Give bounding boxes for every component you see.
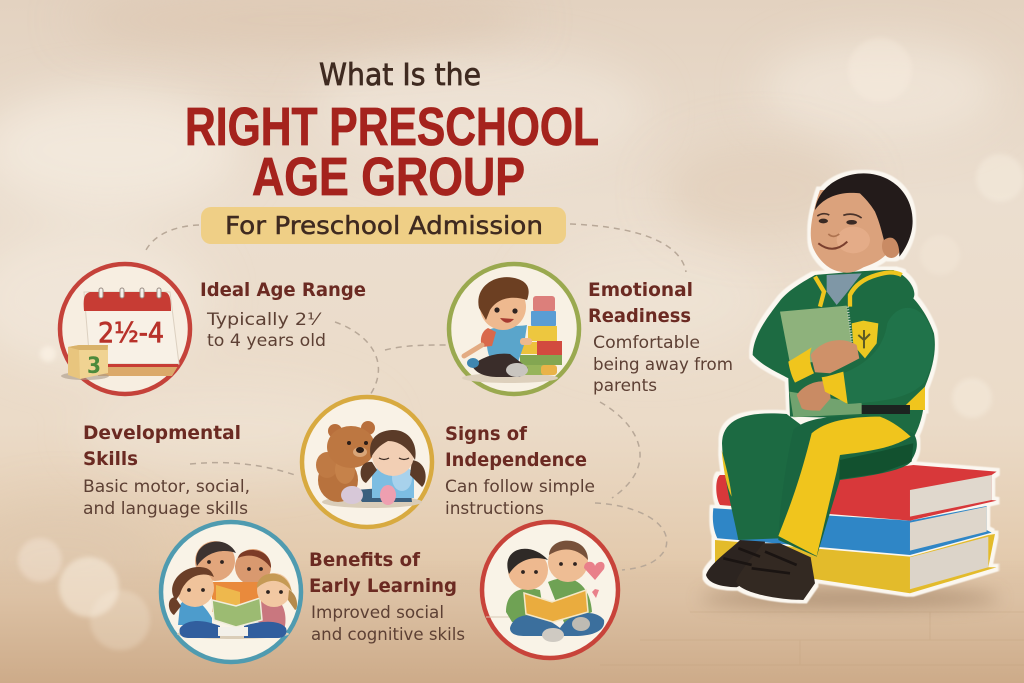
text: emotional readiness: Emotional (588, 279, 693, 301)
text: benefits of early learning: and cognitive skils (311, 625, 465, 645)
figure: head and hair (811, 173, 913, 273)
icon: notebook (780, 306, 862, 417)
text: benefits of early learning: Early Learning (309, 575, 457, 597)
text: signs of independence (445, 423, 595, 519)
panel: reading together icon (482, 522, 618, 658)
text: developmental skills: Developmental (83, 422, 241, 444)
text: emotional readiness: Comfortable (593, 333, 700, 353)
text: emotional readiness (588, 279, 733, 396)
illustration: child sitting on books (706, 173, 997, 600)
title: main line 2: AGE GROUP (252, 147, 525, 207)
text: developmental skills: and language skills (83, 499, 248, 519)
text: benefits of early learning: Improved social (311, 603, 444, 623)
text: emotional readiness: being away from (593, 355, 733, 375)
text: developmental skills (83, 422, 250, 519)
subtitle pill (201, 207, 566, 244)
text: benefits of early learning: Benefits of (309, 549, 421, 571)
text: ideal age range (200, 279, 366, 351)
subtitle pill: For Preschool Admission (225, 211, 543, 240)
text: signs of independence: Signs of (445, 423, 528, 445)
panel: ideal age range icon (60, 264, 190, 394)
figure: hoodie torso (753, 270, 935, 438)
text: developmental skills: Basic motor, social, (83, 477, 250, 497)
text: signs of independence: Independence (445, 449, 587, 471)
text: signs of independence: instructions (445, 499, 544, 519)
panel: ideal age range icon: 2½-4 (98, 316, 164, 349)
panel: benefits of early learning icon (161, 522, 301, 662)
title: intro line: What Is the (319, 58, 481, 93)
icon: stack of books (713, 465, 997, 593)
figure: arms and hands (788, 308, 934, 411)
figure: shoes (706, 540, 815, 600)
title (185, 58, 599, 207)
text: emotional readiness: parents (593, 376, 657, 396)
dashed connectors (146, 224, 686, 570)
text: developmental skills: Skills (83, 448, 138, 470)
text: ideal age range: to 4 years old (207, 331, 326, 351)
icon: shield badge (852, 321, 878, 358)
panel: emotional readiness icon (449, 264, 579, 394)
text: emotional readiness: Readiness (588, 305, 691, 327)
text: ideal age range: Ideal Age Range (200, 279, 366, 301)
figure: legs (722, 413, 917, 557)
text: ideal age range: Typically 2⅟ (206, 310, 322, 330)
panel: signs of independence icon (302, 397, 432, 527)
text: signs of independence: Can follow simple (445, 477, 595, 497)
panel: ideal age range icon: 3 (87, 354, 101, 379)
text: benefits of early learning (309, 549, 465, 645)
title: main line 1: RIGHT PRESCHOOL (185, 97, 599, 157)
